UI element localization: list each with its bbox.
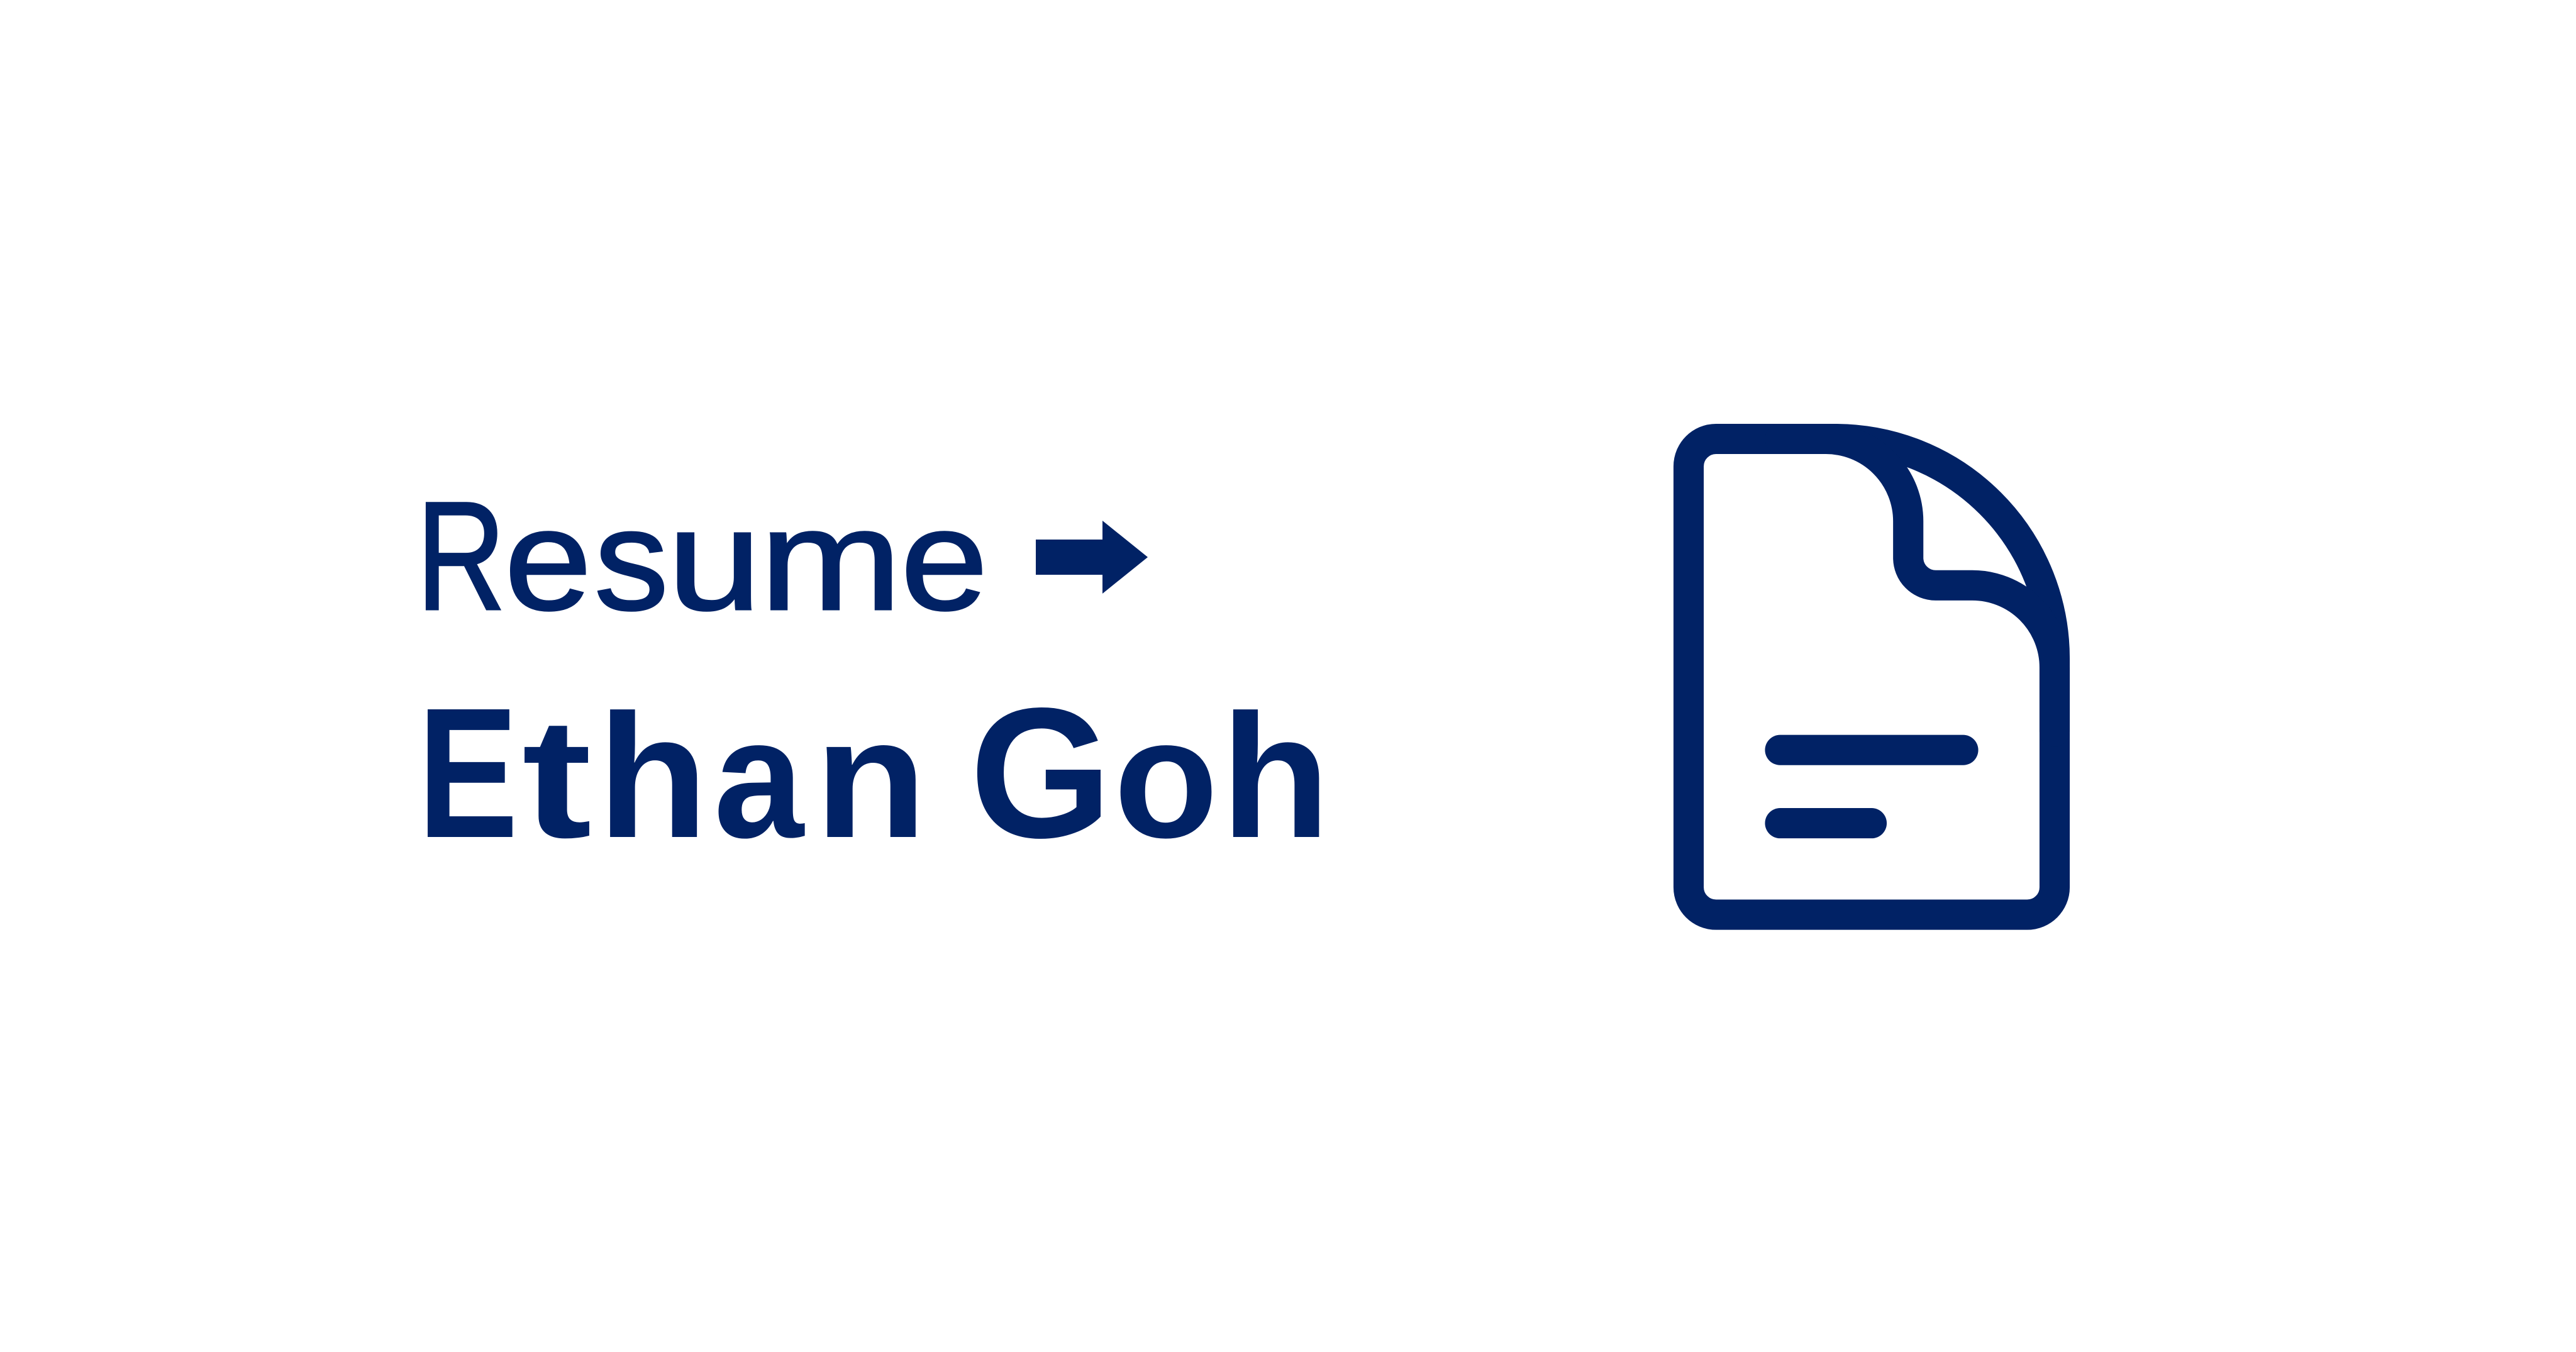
- name: Ethan Goh: t: [522, 684, 592, 873]
- name: Ethan Goh: o: [1114, 684, 1218, 873]
- icon: arrow: [1036, 521, 1148, 594]
- label: Resume: s: [594, 479, 669, 640]
- label: Resume: R: [416, 470, 506, 643]
- name: Ethan Goh: a: [714, 684, 805, 873]
- text lines: [1780, 750, 1963, 823]
- name: Ethan Goh: h: [1221, 679, 1330, 875]
- label: Resume: e: [901, 479, 988, 640]
- document outline: [1689, 439, 2055, 915]
- page fold: [1780, 439, 2055, 732]
- icon: document: [1689, 439, 2055, 915]
- label: Resume: m: [760, 479, 902, 640]
- label: Resume: u: [667, 479, 762, 640]
- name: Ethan Goh: n: [814, 684, 927, 873]
- name: Ethan Goh: E: [418, 669, 518, 877]
- name: Ethan Goh: G: [970, 669, 1112, 877]
- label: Resume: e: [504, 479, 592, 640]
- name: Ethan Goh: h: [597, 679, 708, 875]
